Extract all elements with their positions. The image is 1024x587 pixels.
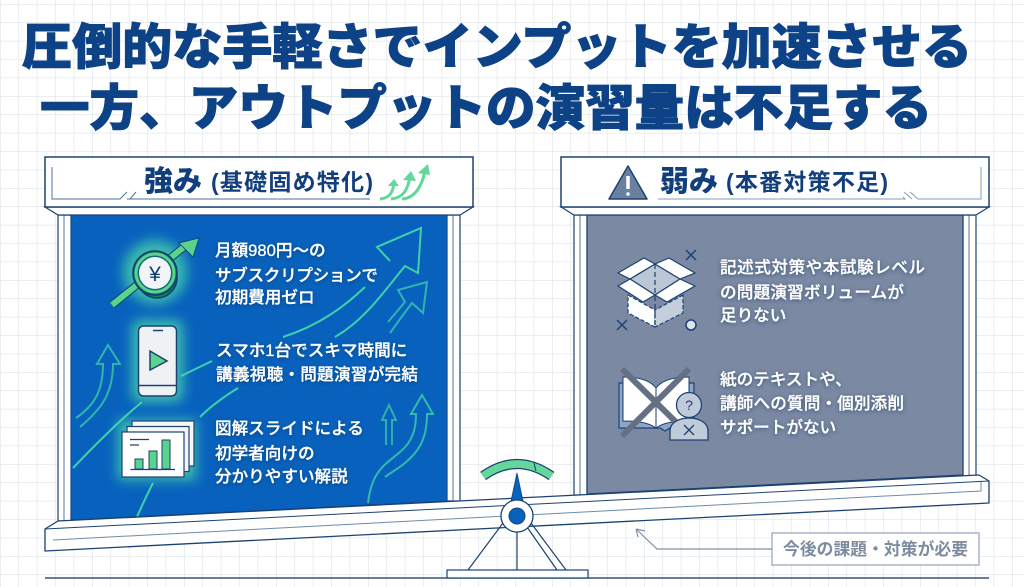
icon: smartphone (132, 320, 183, 402)
header: weaknesses (561, 157, 989, 215)
title: 一方、アウトプットの演習量は不足する (40, 82, 932, 136)
header: strengths: 強み (144, 165, 202, 198)
gauge arc (483, 463, 552, 476)
text: price: 月額980円〜の (215, 241, 326, 260)
text: price: サブスクリプションで (215, 265, 378, 285)
background growth arrows (73, 228, 433, 517)
header: weaknesses: (本番対策不足) (726, 169, 888, 195)
icon: slides with bar chart (118, 420, 196, 480)
text: slides: 分かりやすい解説 (215, 467, 348, 486)
icon: crossed book and person: ? (685, 397, 693, 413)
text: lacking exercises: 記述式対策や本試験レベル (720, 258, 925, 277)
title (22, 21, 972, 136)
icon: crossed book and person (619, 369, 708, 440)
header: weaknesses: 弱み (660, 166, 718, 198)
icon: green up arrows (380, 164, 430, 199)
header: strengths: (基礎固め特化) (211, 169, 373, 195)
grey panel background (587, 215, 963, 494)
text: slides: 図解スライドによる (215, 419, 364, 438)
panel frame columns (58, 215, 460, 521)
callout: future tasks: 今後の課題・対策が必要 (783, 539, 968, 559)
header: strengths (45, 157, 473, 215)
icon: yen coin with arrow (112, 238, 199, 305)
title: 圧倒的な手軽さでインプットを加速させる (22, 21, 972, 75)
text: no support (720, 370, 904, 437)
text: smartphone learning (216, 341, 418, 384)
text: no support: 紙のテキストや、 (720, 370, 852, 389)
text: price (215, 241, 378, 307)
needle (511, 473, 523, 501)
callout: future tasks (636, 529, 979, 565)
fulcrum stand (447, 463, 588, 578)
panel frame columns (574, 215, 976, 495)
text: lacking exercises: の問題演習ボリュームが (720, 282, 904, 302)
text: lacking exercises: 足りない (720, 306, 786, 325)
blue panel background (71, 215, 447, 520)
pivot (501, 500, 533, 532)
text: slides: 初学者向けの (215, 444, 315, 463)
icon: warning triangle (609, 166, 647, 199)
text: lacking exercises (720, 258, 925, 325)
text: smartphone learning: 講義視聴・問題演習が完結 (216, 364, 418, 384)
text: no support: サポートがない (720, 417, 836, 437)
panel: strengths (45, 157, 473, 521)
icon: yen coin with arrow: ¥ (148, 263, 161, 286)
text: no support: 講師への質問・個別添削 (720, 394, 904, 413)
icon: empty box (617, 250, 696, 330)
panel: weaknesses (561, 157, 989, 495)
ground line (45, 577, 989, 579)
seesaw beam (45, 475, 989, 551)
text: smartphone learning: スマホ1台でスキマ時間に (216, 341, 407, 360)
text: price: 初期費用ゼロ (215, 288, 315, 307)
text: slides (215, 419, 364, 486)
